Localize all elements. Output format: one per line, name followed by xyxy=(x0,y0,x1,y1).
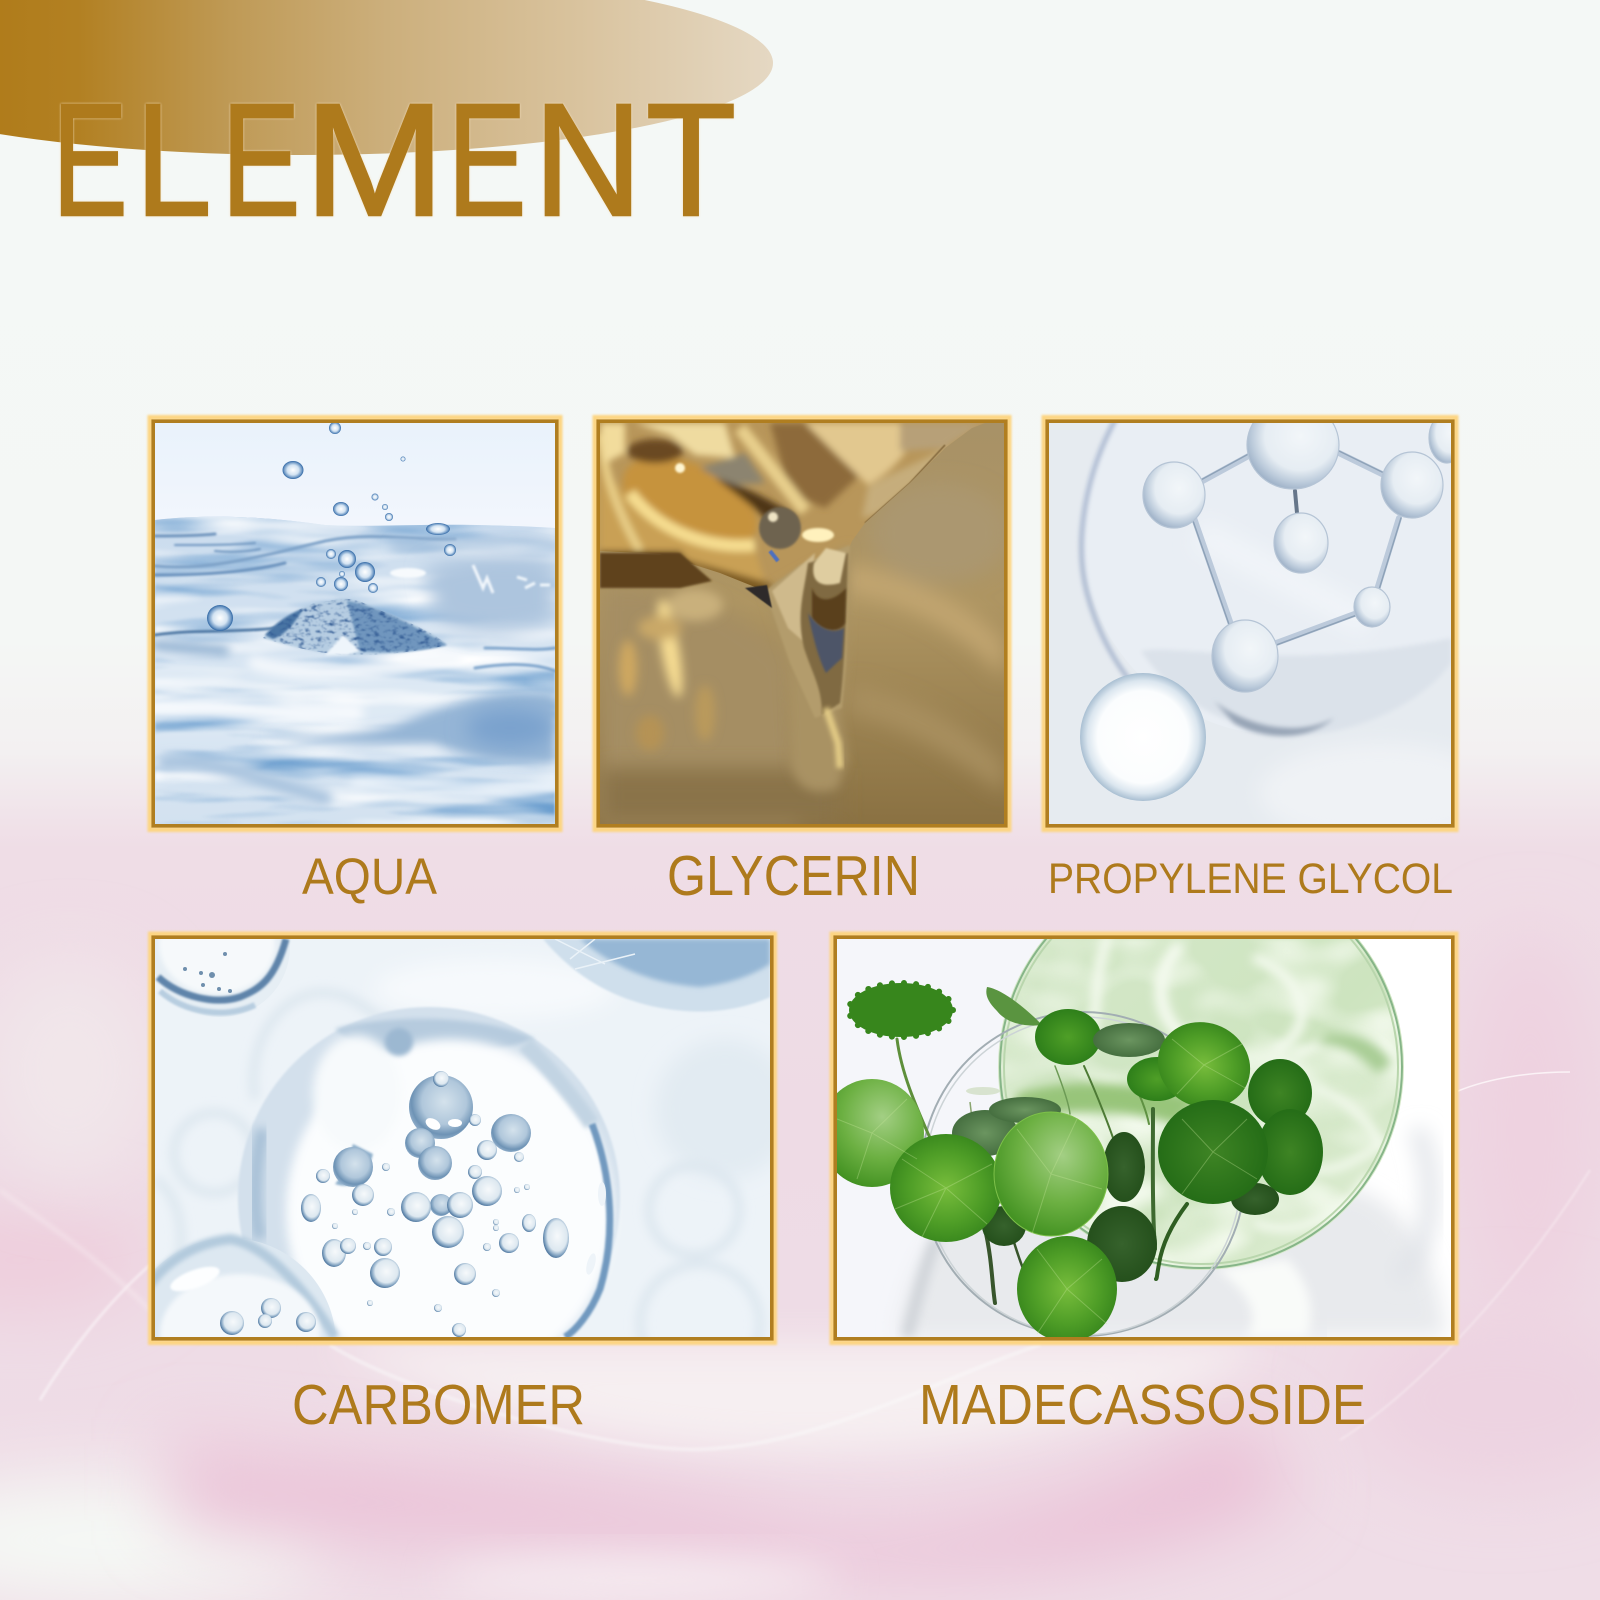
panel: propylene glycol xyxy=(1040,414,1460,834)
title: M xyxy=(304,70,445,249)
bottom left bubble xyxy=(155,1232,340,1337)
small bubbles xyxy=(220,1071,606,1337)
title: T xyxy=(646,70,736,249)
title: E xyxy=(52,70,128,249)
panel: aqua xyxy=(150,418,560,830)
image: molecule in droplet xyxy=(1049,423,1451,824)
leaves xyxy=(820,983,1323,1342)
title: N xyxy=(534,70,642,249)
label: propylene glycol: PROPYLENE GLYCOL xyxy=(1048,855,1453,903)
lower left reflection xyxy=(600,587,802,824)
bonds xyxy=(1192,451,1401,647)
top left bubble xyxy=(155,939,290,1017)
image: bubbles in gel xyxy=(155,939,770,1337)
panel: madecassoside xyxy=(828,930,1460,1346)
ghost rings xyxy=(158,989,764,1337)
frame xyxy=(1044,418,1456,830)
splash mound xyxy=(263,598,448,656)
image: centella leaves in glass dishes xyxy=(837,939,1451,1337)
gold fold xyxy=(600,423,984,589)
frame xyxy=(595,418,1009,830)
label: aqua: AQUA xyxy=(302,848,437,905)
water droplets xyxy=(207,422,456,631)
image: water splash xyxy=(155,422,555,824)
label: glycerin: GLYCERIN xyxy=(667,844,920,908)
stems xyxy=(897,1039,1187,1303)
green dish xyxy=(998,939,1404,1270)
frame xyxy=(832,934,1456,1342)
image: golden liquid xyxy=(600,423,1010,824)
decorative gold ellipse behind title xyxy=(0,0,773,155)
clear glass dish xyxy=(921,1012,1245,1336)
title: L xyxy=(136,70,212,249)
label: carbomer: CARBOMER xyxy=(292,1373,585,1437)
title: E xyxy=(448,70,526,249)
main bubble xyxy=(238,1006,620,1337)
top right bubble xyxy=(543,939,770,1012)
falling stream xyxy=(745,545,850,792)
small clear droplet xyxy=(1080,673,1206,801)
frame xyxy=(150,418,560,830)
panel: glycerin xyxy=(595,418,1010,830)
frame xyxy=(150,934,774,1342)
atoms xyxy=(1142,423,1451,693)
label: madecassoside: MADECASSOSIDE xyxy=(919,1373,1366,1437)
panel: carbomer xyxy=(146,930,778,1346)
title: E xyxy=(222,70,300,249)
right soft glow bands xyxy=(850,491,1004,787)
